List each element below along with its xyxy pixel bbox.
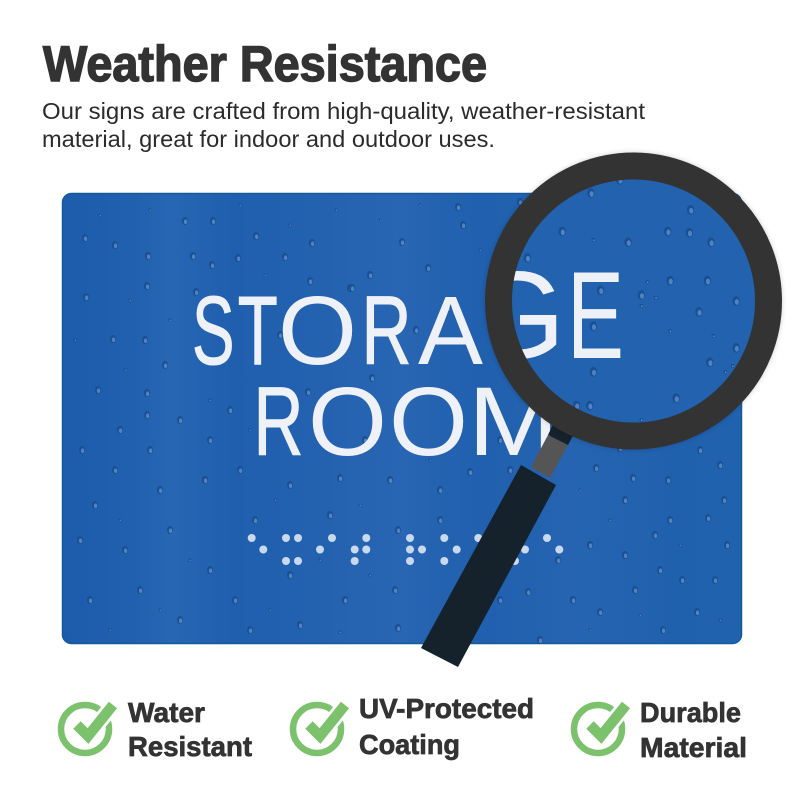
sign text: STORAGE ROOM [192,276,559,476]
sign text: STORAGE ROOM: M [468,367,559,476]
label: Durable [640,697,741,728]
icon: green check [61,705,113,753]
feature: durable material [574,697,747,763]
sign text: STORAGE ROOM: O [389,367,468,476]
icon: green check [574,705,626,753]
label: Resistant [128,731,252,762]
sign text: STORAGE ROOM: A [418,276,483,385]
sign text: STORAGE ROOM: O [278,276,357,385]
feature: water resistant [61,697,252,762]
magnified text: GE: G [469,247,565,385]
handle neck [531,435,568,478]
label: Water [128,697,205,728]
sign text: STORAGE ROOM: R [254,367,304,476]
icon: magnifying glass [421,153,782,667]
sign text: STORAGE ROOM: R [362,276,412,385]
sign text: STORAGE ROOM: O [308,367,387,476]
description text [42,98,646,152]
water droplets [74,198,730,644]
icon: green check [293,705,345,753]
label: UV-Protected [359,693,534,724]
handle grip [421,465,556,667]
description text: Our signs are crafted from high-quality, weather-resistant [42,98,646,124]
magnified text: GE: E [567,247,624,385]
handle collar [548,422,574,445]
sign text: STORAGE ROOM: S [192,276,234,385]
magnified droplets [524,180,740,422]
label: Coating [359,729,460,760]
lens interior [512,180,755,422]
sign plate [62,194,742,644]
panel: blue storage room sign [62,194,742,644]
label: Material [640,732,747,763]
feature: UV-protected coating [293,693,534,760]
braille dots [248,534,563,565]
lens shadow [486,153,782,449]
lens ring [498,166,768,436]
description text: material, great for indoor and outdoor uses. [42,126,495,152]
title: Weather Resistance [43,35,487,92]
sign text: STORAGE ROOM: T [238,276,278,385]
